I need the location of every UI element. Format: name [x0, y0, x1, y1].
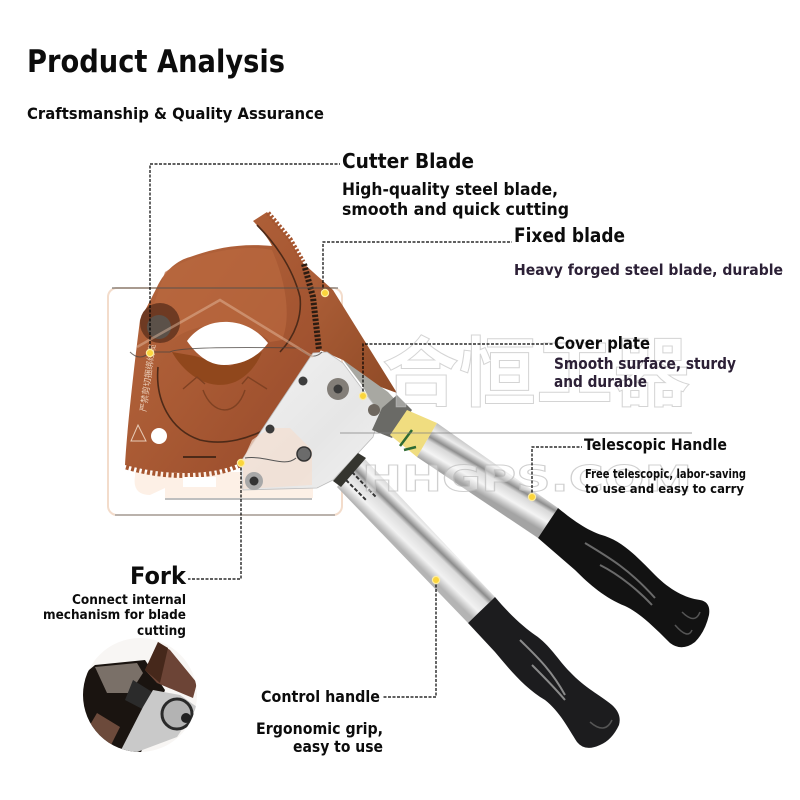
- callout: cutter blade: Cutter Blade: [342, 149, 474, 173]
- callout: cover plate: [554, 334, 736, 391]
- watermark panel behind tool: [108, 288, 342, 515]
- callout: fixed blade: Fixed blade: [514, 224, 625, 247]
- callout: fork: Connect internal: [72, 592, 186, 608]
- lower control handle: [333, 453, 620, 748]
- callout: cover plate: and durable: [554, 372, 647, 391]
- inset: dark background: [83, 660, 165, 755]
- callout: telescopic handle: [584, 435, 746, 496]
- callout: fixed blade: [514, 224, 783, 279]
- callout: cover plate: Smooth surface, sturdy: [554, 354, 736, 373]
- blade teeth: bottom cutting edge: [126, 465, 240, 475]
- callout: fork: cutting: [137, 623, 186, 639]
- leader: fixed blade: [321, 242, 512, 297]
- plate bolts: [327, 378, 349, 400]
- product photo: ratchet cable cutter: [108, 212, 709, 748]
- pivot bolt: [140, 303, 180, 343]
- lower black grip: [468, 597, 620, 748]
- callout: cover plate: Cover plate: [554, 334, 650, 353]
- upper telescopic handle: [372, 395, 709, 647]
- blade teeth: upper hook: [268, 213, 303, 262]
- callout: telescopic handle: Telescopic Handle: [584, 435, 727, 454]
- steel block behind plate: [343, 360, 400, 422]
- leader: telescopic handle: [528, 447, 582, 501]
- callout: telescopic handle: to use and easy to carry: [585, 481, 744, 496]
- inset: silver bar: [120, 690, 197, 752]
- inset: teeth: [145, 642, 168, 683]
- subtitle: Craftsmanship & Quality Assurance: [27, 104, 324, 123]
- callout: fork: mechanism for blade: [43, 607, 186, 623]
- callout: cutter blade: [342, 149, 569, 219]
- inset: nut: [162, 699, 192, 729]
- callout: cutter blade: smooth and quick cutting: [342, 200, 569, 219]
- blade upper disc face: [145, 248, 287, 342]
- peach watermark on plate: [243, 428, 312, 489]
- watermark: logo and brand: 合恒工器: [382, 312, 690, 422]
- callout: telescopic handle: Free telescopic, labor-saving: [585, 466, 746, 481]
- upper black grip: [538, 508, 709, 647]
- callout: control handle: [256, 687, 383, 756]
- inset: brown block: [90, 713, 120, 744]
- fixed blade: [303, 263, 397, 393]
- leader: cutter blade: [146, 164, 340, 357]
- moving cutter blade: [125, 212, 321, 487]
- lower blade shadow beneath opening: [172, 352, 262, 385]
- callout: cutter blade: High-quality steel blade,: [342, 180, 558, 199]
- smile mark: [183, 377, 267, 410]
- warning marking: 严禁剪切捆绑线缆: [137, 343, 159, 412]
- leader: fork: [188, 459, 245, 579]
- nut: [245, 472, 263, 490]
- callout: control handle: easy to use: [293, 737, 383, 756]
- inset photo: fork close-up: [83, 638, 197, 755]
- watermark: logo and brand: [112, 288, 692, 500]
- title: Product Analysis: [27, 44, 285, 80]
- small hole: [151, 428, 167, 444]
- yellow collar: [390, 410, 437, 457]
- watermark: logo and brand: HHGPS.COM: [362, 459, 692, 500]
- callout: fork: [43, 562, 187, 639]
- white gap below teeth: [183, 477, 216, 487]
- leader: cover plate: [359, 344, 553, 400]
- cover plate: [240, 352, 380, 490]
- cable opening: [187, 322, 268, 365]
- warning triangle: [131, 425, 146, 441]
- inset: threaded bolt: [125, 680, 152, 709]
- blade teeth: lower dark rack: [304, 264, 319, 350]
- blade inner groove: [158, 225, 300, 442]
- leader: control handle: [383, 576, 440, 697]
- callout: control handle: Control handle: [261, 687, 380, 706]
- slot: [183, 456, 216, 458]
- callout: fork: Fork: [130, 562, 187, 590]
- callout: control handle: Ergonomic grip,: [256, 719, 383, 738]
- inset: brown blade: [145, 642, 197, 698]
- inset: forged arm: [95, 663, 143, 693]
